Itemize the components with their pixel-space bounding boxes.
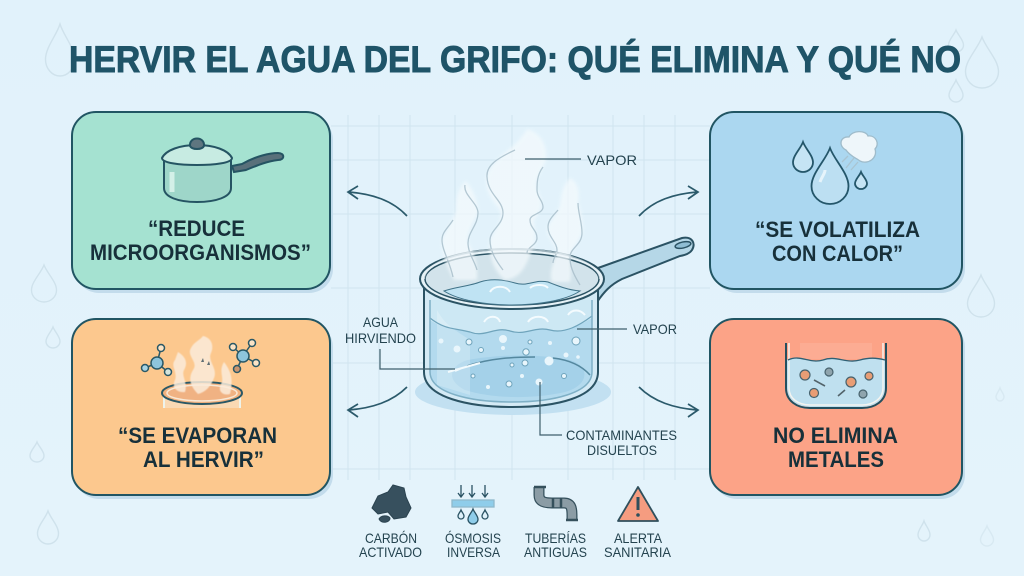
item: alerta sanitaria: SANITARIA [604, 544, 672, 560]
text: se evaporan: “SE EVAPORAN [118, 423, 277, 448]
panel: se evaporan al hervir [72, 319, 333, 499]
title: HERVIR EL AGUA DEL GRIFO: QUÉ ELIMINA Y QUÉ NO [69, 39, 961, 80]
icon: filter membrane [452, 485, 494, 524]
text: no elimina: NO ELIMINA [773, 423, 898, 448]
label: vapor top: VAPOR [587, 152, 637, 168]
label: vapor top [525, 152, 637, 168]
item: carbón activado: ACTIVADO [359, 544, 422, 560]
text: se volatiliza: “SE VOLATILIZA [755, 217, 920, 242]
icon: pipe [534, 487, 578, 520]
icon: coal [372, 485, 411, 522]
panel: no elimina metales [710, 319, 965, 499]
arrow: to top left panel [348, 186, 407, 216]
pot rim and boiling surface [420, 249, 604, 309]
item: tuberías antiguas [524, 487, 587, 560]
text: tuberías antiguas: TUBERÍAS [525, 530, 586, 546]
text: con calor: CON CALOR” [772, 241, 903, 266]
icon: sediment in water container [786, 343, 886, 408]
text: alerta sanitaria: ALERTA [614, 530, 663, 546]
item: ósmosis inversa [445, 485, 501, 560]
pot body [424, 285, 598, 407]
label: vapor middle [577, 321, 677, 337]
icon: evaporating pot with molecules [142, 336, 260, 408]
text: ósmosis inversa: ÓSMOSIS [445, 530, 501, 546]
text: microorganismos: MICROORGANISMOS” [90, 240, 311, 265]
item: tuberías antiguas: ANTIGUAS [524, 544, 587, 560]
text: reduce: “REDUCE [148, 216, 245, 241]
text: metales: METALES [788, 447, 884, 472]
label: agua hirviendo [345, 314, 455, 369]
bubbles [438, 335, 580, 389]
label: vapor middle: VAPOR [633, 321, 677, 337]
pot handle [597, 238, 694, 302]
pot outline [424, 285, 598, 407]
label: agua hirviendo: AGUA [363, 314, 399, 330]
panel: reduce microorganismos [72, 112, 333, 293]
icon: pot with lid [162, 138, 283, 202]
label: contaminantes disueltos: DISUELTOS [587, 442, 657, 458]
arrow: to bottom left panel [348, 387, 407, 417]
label: contaminantes disueltos [540, 382, 677, 458]
arrow: to bottom right panel [639, 387, 698, 417]
label: contaminantes disueltos: CONTAMINANTES [566, 427, 677, 443]
steam [442, 129, 582, 282]
item: carbón activado [359, 485, 422, 560]
text: al hervir: AL HERVIR” [143, 447, 264, 472]
item: alerta sanitaria [604, 487, 672, 560]
item: ósmosis inversa: INVERSA [447, 544, 501, 560]
central boiling pot illustration [415, 129, 694, 415]
water [430, 300, 592, 402]
icon: drops and steam cloud [793, 132, 877, 204]
text: carbón activado: CARBÓN [365, 530, 417, 546]
panel: se volatiliza con calor [710, 112, 965, 293]
label: agua hirviendo: HIRVIENDO [345, 330, 416, 346]
arrow: to top right panel [639, 186, 698, 216]
icon: warning triangle [618, 487, 658, 521]
